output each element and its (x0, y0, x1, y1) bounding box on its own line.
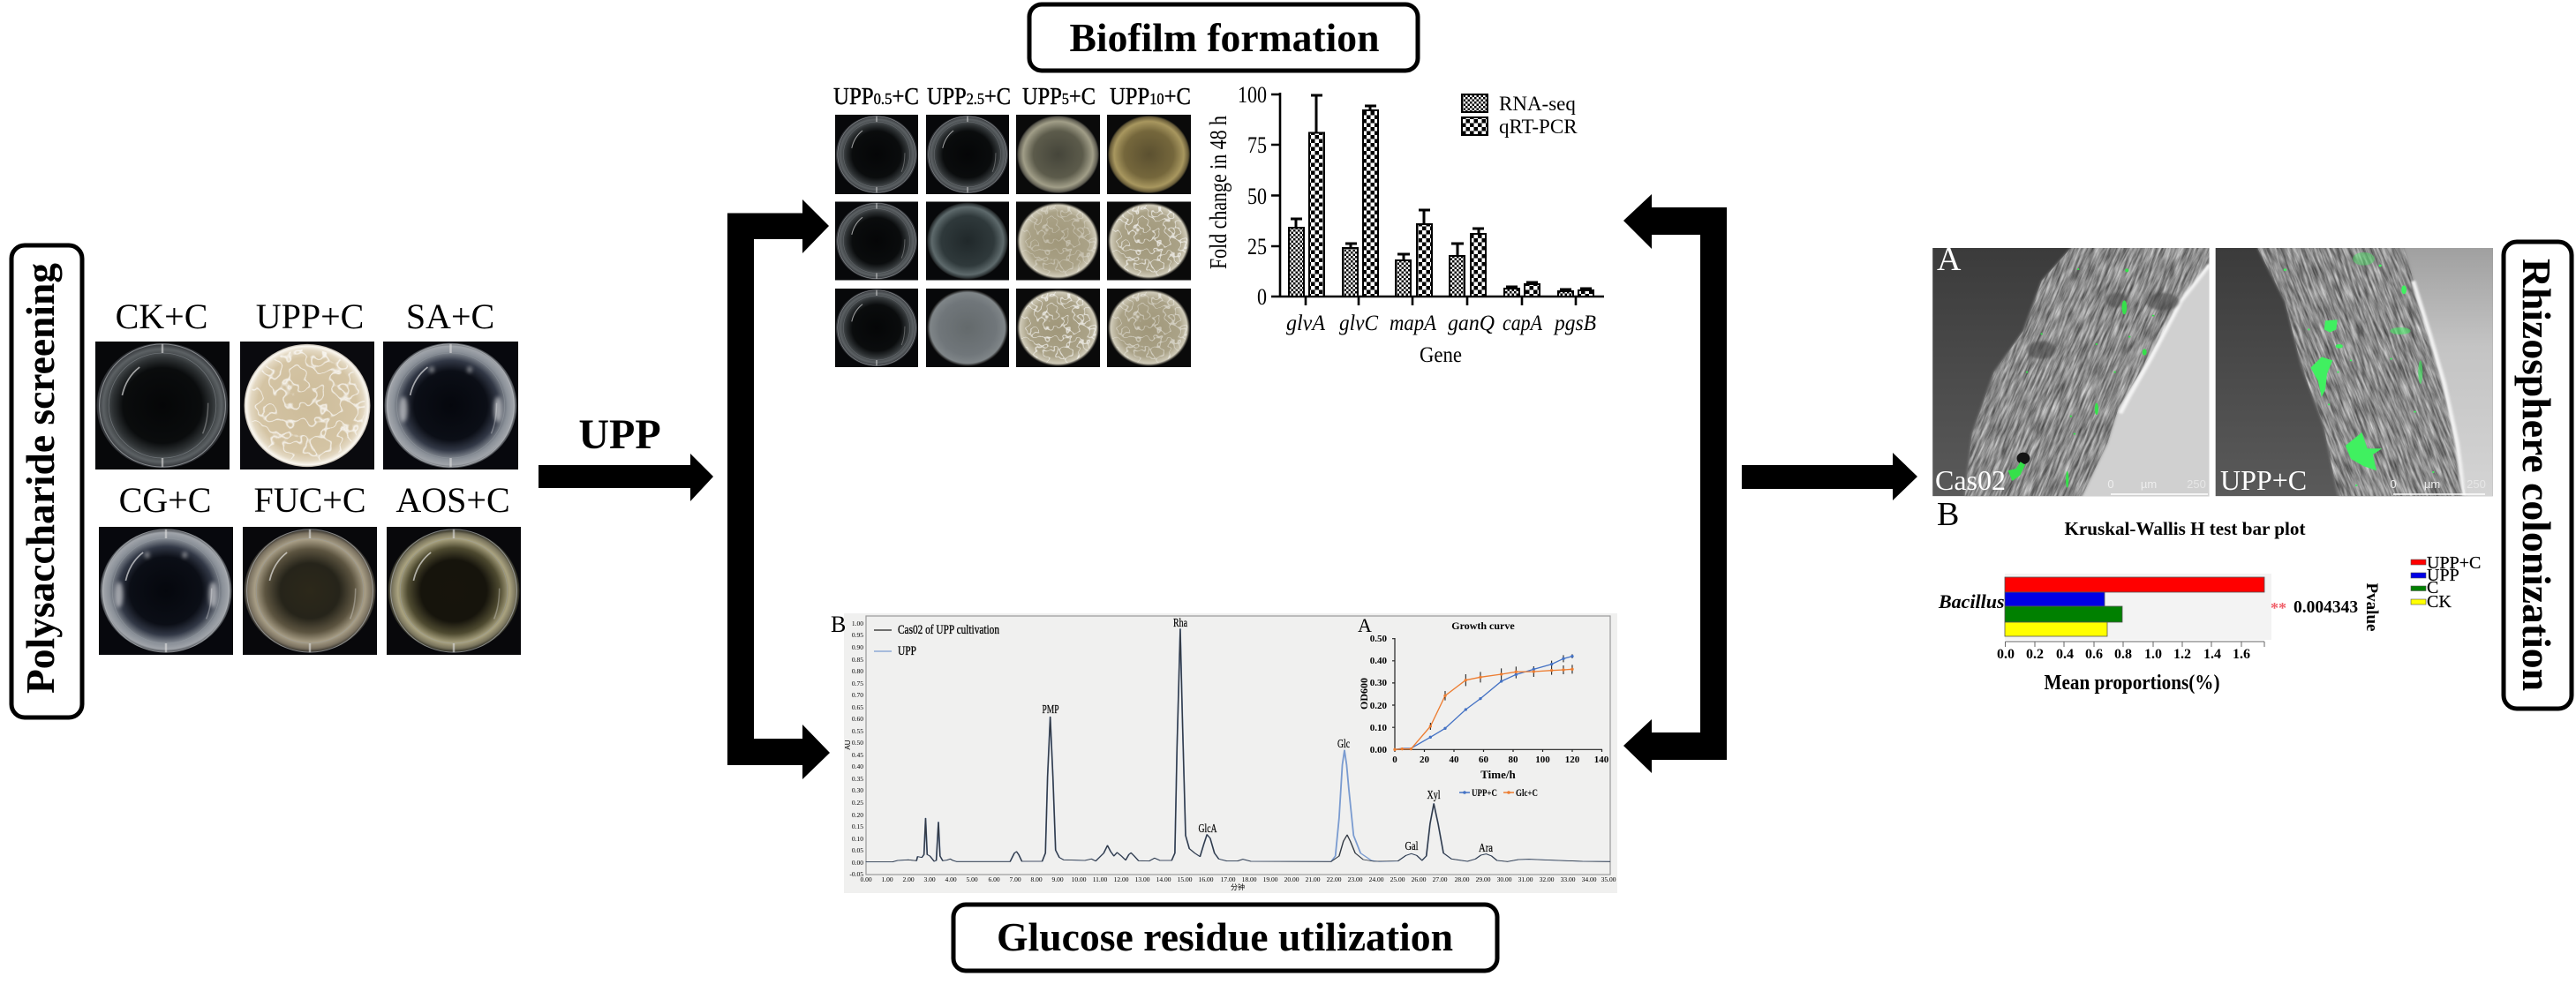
legend: CK (2427, 592, 2452, 612)
y tick labels: 0.70 (852, 691, 863, 699)
gene labels: glvC (1339, 312, 1378, 335)
UPP trace (866, 629, 1610, 862)
inset: growth curve: Time/h (1480, 768, 1517, 781)
legend: UPP+C (2427, 553, 2481, 573)
well photo: CG+C (99, 527, 233, 655)
heading: Biofilm formation: Biofilm formation (1070, 15, 1379, 60)
arrow: left bracket (727, 199, 830, 779)
heading: Rhizosphere colonization: Rhizosphere colonization (2514, 259, 2559, 691)
concentration labels: UPP2.5+C (927, 83, 1011, 109)
y tick labels: -0.05 (849, 870, 863, 878)
peak labels: Rha (1173, 617, 1188, 630)
inset: growth curve: 0.40 (1370, 656, 1388, 666)
y tick labels: 0.75 (852, 680, 863, 687)
well photo: SA+C (383, 342, 518, 469)
y tick labels: 0.40 (852, 762, 863, 770)
scale bar (2390, 477, 2486, 494)
well labels: UPP+C (256, 297, 364, 336)
x tick labels: 23.00 (1348, 875, 1363, 883)
significance stars: ** (2271, 599, 2286, 617)
gene labels: glvA (1286, 312, 1326, 335)
peak labels: Gal (1405, 840, 1419, 853)
x tick labels: 5.00 (966, 875, 978, 883)
inset: growth curve: 0.20 (1370, 701, 1388, 711)
y tick labels: 0.30 (852, 786, 863, 794)
inset: growth curve: 120 (1565, 755, 1580, 765)
x tick labels: 30.00 (1497, 875, 1512, 883)
inset: growth curve: 140 (1594, 755, 1609, 765)
x tick labels: 29.00 (1476, 875, 1491, 883)
x tick labels: 1.00 (881, 875, 893, 883)
p value: 0.004343 (2294, 598, 2358, 617)
peak labels: Xyl (1427, 789, 1441, 802)
inset: growth curve: OD600 (1358, 678, 1370, 710)
y tick labels: 0.95 (852, 631, 863, 639)
tick labels: 0.6 (2085, 647, 2103, 662)
scale bar: 0 (2107, 477, 2114, 491)
x tick labels: 24.00 (1369, 875, 1384, 883)
plot background (2005, 574, 2271, 640)
y tick labels: 0.80 (852, 667, 863, 675)
well photo: UPP+C (240, 342, 374, 469)
panel: glucose residue utilization (831, 612, 1617, 971)
arrow: right bracket (1623, 194, 1727, 773)
x tick labels: 15.00 (1178, 875, 1193, 883)
x tick labels: 11.00 (1093, 875, 1108, 883)
genus label: Bacillus (1938, 590, 2005, 612)
y tick labels: 0.85 (852, 656, 863, 664)
heading: Biofilm formation (1029, 4, 1418, 71)
x tick labels: 28.00 (1455, 875, 1470, 883)
micrograph: UPP+C (2216, 248, 2493, 496)
inset: growth curve: 0.00 (1370, 745, 1388, 755)
inset legend: Glc+C (1516, 786, 1538, 799)
x tick labels: 19.00 (1263, 875, 1278, 883)
inset: growth curve: 100 (1535, 755, 1550, 765)
peak labels (1042, 617, 1494, 855)
inset: growth curve: 60 (1479, 755, 1488, 765)
x tick labels: 22.00 (1327, 875, 1342, 883)
x tick labels: 27.00 (1433, 875, 1448, 883)
inset: growth curve: 20 (1420, 755, 1430, 765)
x tick labels (860, 875, 1616, 883)
x tick labels: 4.00 (945, 875, 957, 883)
well photo: FUC+C (243, 527, 377, 655)
peak labels: PMP (1042, 703, 1059, 717)
y tick labels: 0.45 (852, 751, 863, 759)
Cas02 label: Cas02 (1935, 464, 2006, 496)
x tick labels: 2.00 (902, 875, 915, 883)
arrow: to rhizosphere colonization (1742, 453, 1917, 500)
tick labels: 1.4 (2203, 647, 2221, 662)
legend: UPP (2427, 566, 2459, 585)
inset: growth curve: 0.50 (1370, 634, 1388, 644)
peak labels: GlcA (1199, 823, 1217, 836)
y ticks: 100 (1238, 82, 1267, 108)
gene labels: mapA (1390, 312, 1437, 335)
x tick labels: 18.00 (1242, 875, 1257, 883)
y ticks: 75 (1247, 132, 1267, 158)
panel letter B: B (831, 612, 846, 637)
y tick labels: 0.50 (852, 739, 863, 747)
well labels: CK+C (116, 297, 207, 336)
y ticks: 0 (1257, 284, 1267, 310)
y tick labels: 0.55 (852, 727, 863, 735)
legend (1462, 93, 1578, 138)
growth lines (1393, 654, 1574, 751)
scale bar: 0 (2390, 477, 2397, 491)
x axis title: 分钟 (1231, 883, 1245, 891)
well photo grid (835, 115, 1191, 367)
x tick labels: 25.00 (1390, 875, 1405, 883)
y tick labels: 0.65 (852, 703, 863, 711)
panel letter A: A (1937, 241, 1962, 278)
well labels: FUC+C (253, 480, 366, 520)
tick labels: 1.2 (2173, 647, 2191, 662)
legend (2411, 553, 2481, 612)
trace legend (874, 623, 999, 658)
x tick labels: 3.00 (923, 875, 936, 883)
UPP+C label: UPP+C (2220, 464, 2307, 496)
x tick labels: 17.00 (1221, 875, 1236, 883)
heading: Glucose residue utilization (953, 905, 1497, 971)
micrograph: Cas02 (1932, 248, 2210, 496)
concentration labels: UPP0.5+C (833, 83, 919, 109)
well labels: CG+C (119, 480, 211, 520)
well labels: SA+C (406, 297, 494, 336)
tick labels: 1.0 (2144, 647, 2162, 662)
y axis title: AU (844, 740, 852, 750)
tick labels: 0.2 (2026, 647, 2044, 662)
y tick labels: 0.05 (852, 846, 863, 854)
x tick labels: 13.00 (1135, 875, 1150, 883)
heading: Rhizosphere colonization (2504, 242, 2572, 709)
scale bar (2107, 477, 2208, 494)
x tick labels: 20.00 (1284, 875, 1299, 883)
well labels (116, 297, 510, 520)
legend: qRT-PCR (1499, 116, 1578, 138)
x tick labels: 35.00 (1601, 875, 1616, 883)
y ticks: 50 (1247, 184, 1267, 209)
inset: growth curve: 80 (1508, 755, 1518, 765)
arrow: UPP to biofilm and glucose (539, 411, 713, 501)
x tick labels: 12.00 (1114, 875, 1129, 883)
gene labels: pgsB (1553, 312, 1596, 335)
legend: C (2427, 578, 2438, 597)
scale bar: µm (2424, 477, 2440, 491)
y tick labels: 0.20 (852, 811, 863, 819)
y ticks: 25 (1247, 234, 1267, 259)
tick labels: 1.6 (2233, 647, 2250, 662)
concentration labels (833, 83, 1191, 109)
gene labels (1286, 312, 1596, 335)
x tick labels: 14.00 (1156, 875, 1171, 883)
legend: RNA-seq (1499, 93, 1576, 115)
inset: growth curve: 0 (1392, 755, 1397, 765)
y tick labels: 0.35 (852, 775, 863, 783)
inset legend (1459, 786, 1538, 799)
inset letter and title: A (1358, 614, 1372, 636)
scale bar: µm (2141, 477, 2157, 491)
tick labels (1997, 647, 2250, 662)
inset: growth curve: Growth curve (1451, 620, 1515, 632)
x tick labels: 16.00 (1199, 875, 1214, 883)
x tick labels: 9.00 (1051, 875, 1064, 883)
trace legend: UPP (898, 644, 916, 658)
tick labels: 0.4 (2056, 647, 2074, 662)
x axis title: Mean proportions(%) (2045, 672, 2219, 695)
inset axes and tick labels (1392, 638, 1602, 752)
p value title: Pvalue (2362, 582, 2381, 632)
y tick labels: 1.00 (852, 620, 863, 627)
y tick labels: 0.00 (852, 859, 863, 867)
chart title: Kruskal-Wallis H test bar plot (2064, 518, 2306, 539)
error bars (1291, 95, 1592, 291)
tick labels: 0.8 (2114, 647, 2132, 662)
chromatogram traces (866, 629, 1610, 862)
x tick labels: 33.00 (1561, 875, 1576, 883)
concentration labels: UPP5+C (1022, 83, 1096, 109)
y tick labels: 0.90 (852, 643, 863, 651)
well photo: AOS+C (387, 527, 521, 655)
x tick labels: 31.00 (1518, 875, 1533, 883)
x tick labels: 32.00 (1540, 875, 1555, 883)
x tick labels: 6.00 (988, 875, 1000, 883)
y tick labels: 0.15 (852, 823, 863, 830)
y tick labels (849, 620, 863, 878)
x axis label: Gene (1420, 343, 1462, 367)
y ticks (1238, 82, 1267, 310)
x tick labels: 26.00 (1412, 875, 1427, 883)
x tick labels: 21.00 (1306, 875, 1321, 883)
y tick labels: 0.60 (852, 715, 863, 723)
inset: growth curve: 0.30 (1370, 678, 1388, 688)
peak labels: Glc (1337, 738, 1350, 751)
heading: Polysaccharide screening (11, 245, 82, 717)
axes (1271, 93, 1604, 305)
panel: polysaccharide screening (11, 245, 521, 717)
chromatogram background (844, 613, 1617, 893)
inset legend: UPP+C (1472, 786, 1497, 799)
trace legend: Cas02 of UPP cultivation (898, 623, 999, 637)
arrow: UPP to biofilm and glucose: UPP (578, 411, 661, 458)
concentration labels: UPP10+C (1110, 83, 1191, 109)
heading: Glucose residue utilization: Glucose residue utilization (997, 914, 1453, 959)
well photo: CK+C (95, 342, 230, 469)
panel: rhizosphere colonization (1932, 240, 2574, 711)
panel: biofilm formation (833, 4, 1604, 367)
inset: growth curve (1358, 614, 1609, 799)
inset: growth curve: 40 (1450, 755, 1459, 765)
x tick labels: 10.00 (1072, 875, 1087, 883)
inset: growth curve: 0.10 (1370, 723, 1388, 733)
bars (1289, 110, 1593, 297)
gene labels: capA (1503, 312, 1543, 335)
peak labels: Ara (1479, 842, 1494, 855)
axis (2006, 642, 2264, 647)
y tick labels: 0.10 (852, 835, 863, 843)
x tick labels: 8.00 (1030, 875, 1043, 883)
bars (2005, 577, 2264, 636)
Cas02 trace (866, 629, 1610, 862)
plot frame (866, 616, 1610, 875)
heading: Polysaccharide screening: Polysaccharide screening (18, 263, 63, 694)
well labels: AOS+C (395, 480, 510, 520)
x tick labels: 0.00 (860, 875, 872, 883)
scale bar: 250 (2187, 477, 2206, 491)
gene labels: ganQ (1448, 312, 1495, 335)
tick labels: 0.0 (1997, 647, 2015, 662)
scale bar: 250 (2467, 477, 2486, 491)
bar chart: Bacillus mean proportions (1938, 553, 2481, 695)
x tick labels: 34.00 (1582, 875, 1597, 883)
bar chart: fold change in 48 h (1205, 82, 1604, 367)
panel letter B: B (1937, 496, 1959, 533)
x tick labels: 7.00 (1009, 875, 1021, 883)
y axis label: Fold change in 48 h (1205, 116, 1232, 269)
y tick labels: 0.25 (852, 799, 863, 807)
